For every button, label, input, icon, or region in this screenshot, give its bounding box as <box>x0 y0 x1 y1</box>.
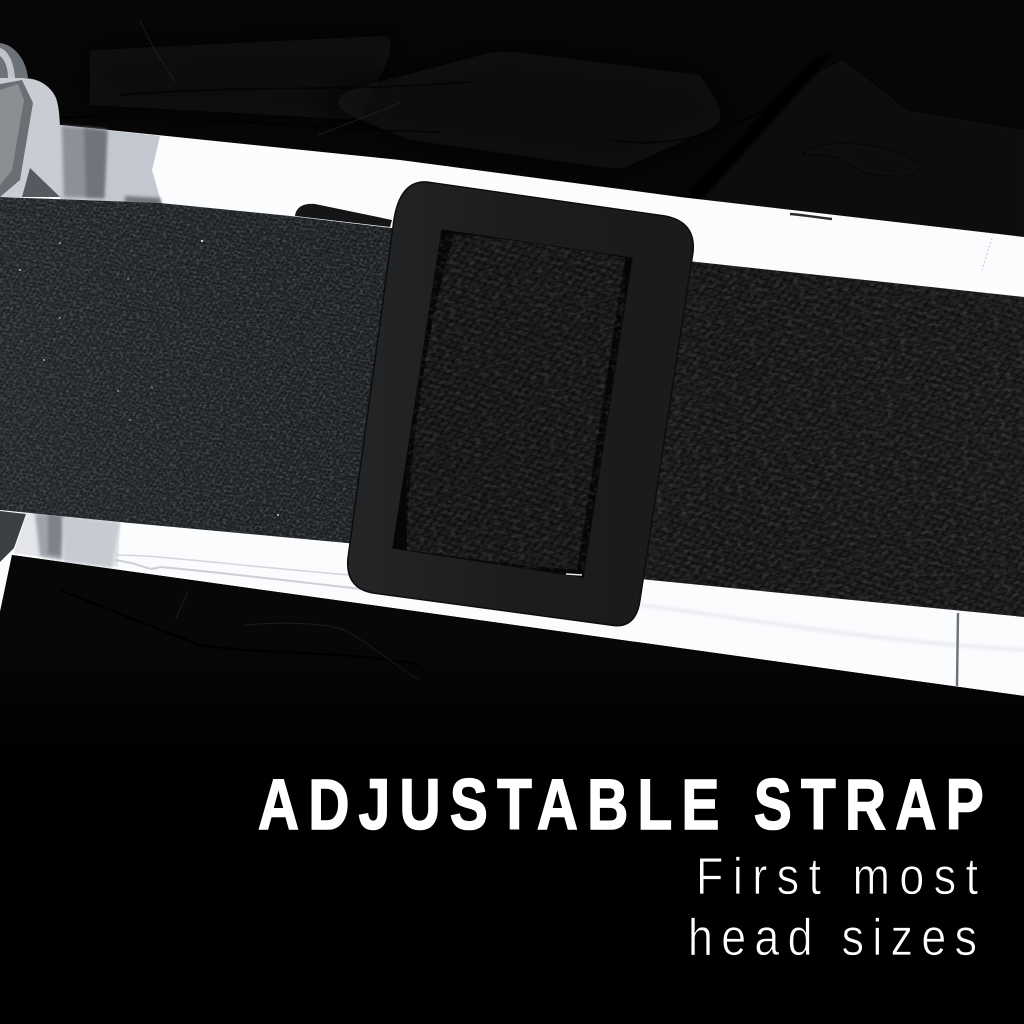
buckle window shadow <box>393 230 632 577</box>
background: dark rock surface <box>0 0 1024 260</box>
fabric in buckle window <box>407 234 625 570</box>
elastic strap <box>0 190 1024 630</box>
rear strap tail behind buckle <box>295 204 392 227</box>
clear goggle frame band <box>0 125 1024 696</box>
bottom dark surface <box>0 555 1024 696</box>
buckle <box>348 182 693 626</box>
subtitle line 1: First most <box>696 848 979 906</box>
buckle glint <box>566 574 582 575</box>
headline: ADJUSTABLE STRAP <box>258 765 984 844</box>
subtitle <box>688 848 979 967</box>
strap dust specks <box>19 240 279 516</box>
subtitle line 2: head sizes <box>688 909 977 967</box>
clear goggle side clip <box>0 43 60 562</box>
